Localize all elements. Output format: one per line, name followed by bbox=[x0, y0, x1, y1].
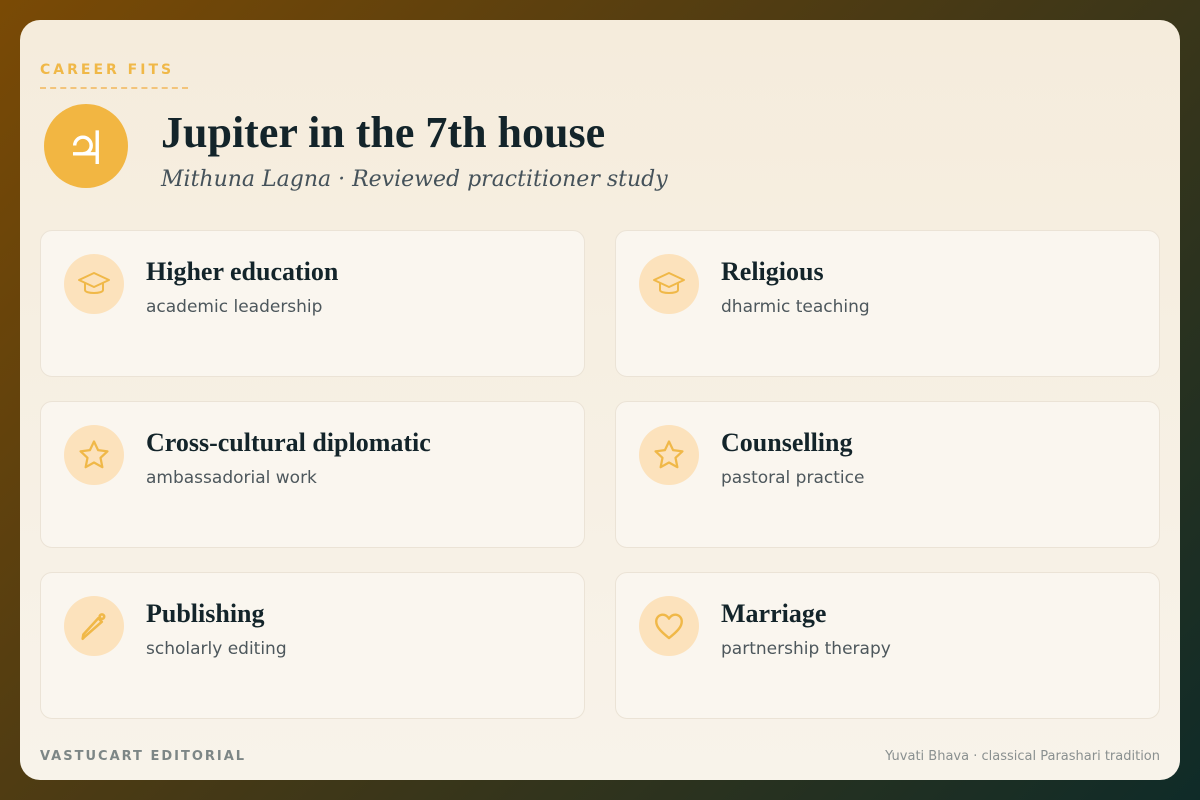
panel: counselling: Counselling bbox=[721, 428, 852, 457]
icon: graduation cap bbox=[64, 254, 124, 314]
icon: pen bbox=[64, 596, 124, 656]
panel: religious: Religious bbox=[721, 257, 824, 286]
panel: religious bbox=[615, 230, 1160, 377]
title: Jupiter in the 7th house bbox=[161, 108, 605, 157]
subtitle: Mithuna Lagna · Reviewed practitioner study bbox=[161, 167, 668, 192]
panel: marriage: partnership therapy bbox=[721, 639, 891, 659]
icon: graduation cap bbox=[639, 254, 699, 314]
kicker label: CAREER FITS bbox=[40, 62, 174, 78]
icon: jupiter badge: ♃ bbox=[65, 121, 107, 175]
footer right: Yuvati Bhava · classical Parashari tradition bbox=[885, 749, 1160, 764]
panel: counselling: pastoral practice bbox=[721, 468, 864, 488]
panel: cross-cultural diplomatic: Cross-cultural diplomatic bbox=[146, 428, 431, 457]
panel: counselling bbox=[615, 401, 1160, 548]
panel: publishing: scholarly editing bbox=[146, 639, 287, 659]
panel: cross-cultural diplomatic: ambassadorial work bbox=[146, 468, 317, 488]
panel: cross-cultural diplomatic bbox=[40, 401, 585, 548]
icon: heart bbox=[639, 596, 699, 656]
panel: higher education: Higher education bbox=[146, 257, 338, 286]
panel: higher education bbox=[40, 230, 585, 377]
panel: marriage: Marriage bbox=[721, 599, 826, 628]
panel: marriage bbox=[615, 572, 1160, 719]
footer left: VASTUCART EDITORIAL bbox=[40, 749, 246, 764]
panel: religious: dharmic teaching bbox=[721, 297, 870, 317]
panel: higher education: academic leadership bbox=[146, 297, 322, 317]
icon: jupiter badge bbox=[44, 104, 128, 188]
icon: star bbox=[639, 425, 699, 485]
panel: publishing: Publishing bbox=[146, 599, 265, 628]
panel: publishing bbox=[40, 572, 585, 719]
icon: star bbox=[64, 425, 124, 485]
